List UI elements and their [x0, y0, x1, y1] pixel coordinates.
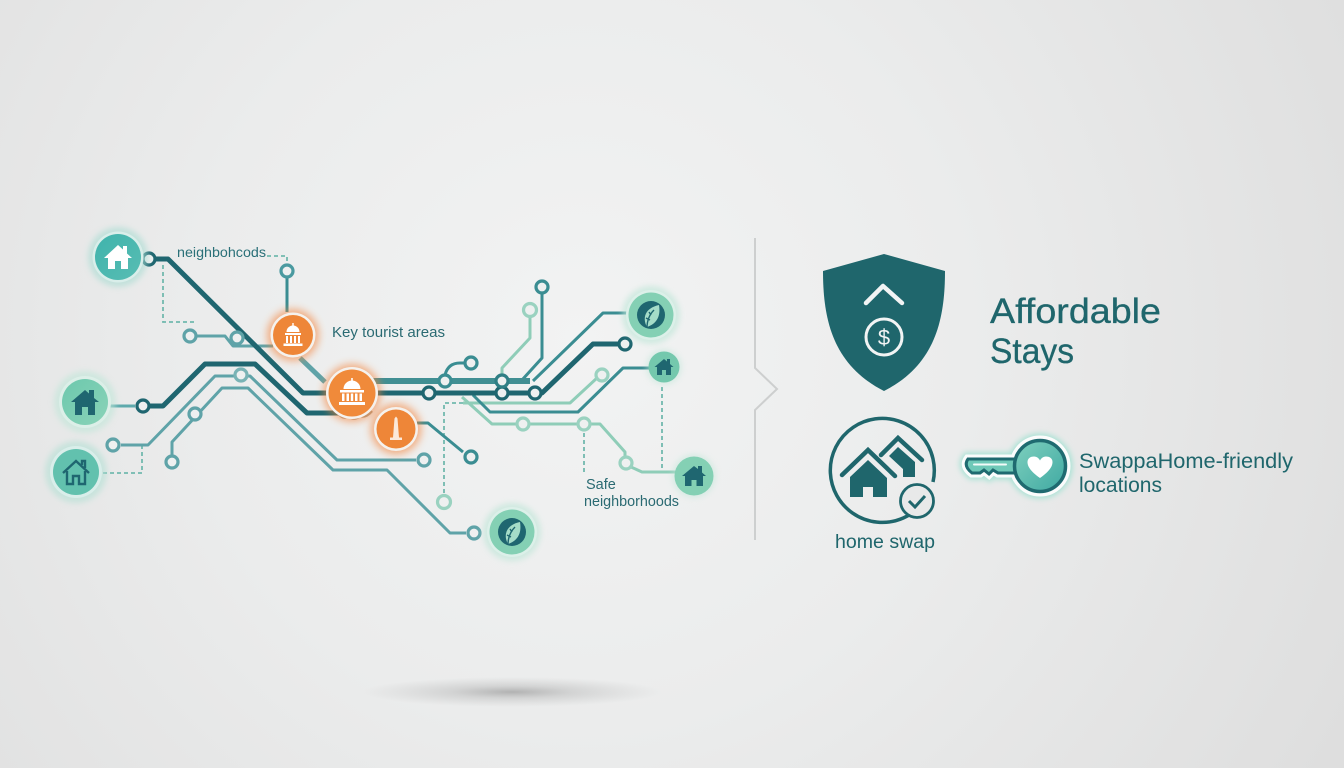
dark routes — [150, 259, 618, 413]
icon: leaf upper right — [622, 286, 680, 344]
panel: affordable stays — [823, 254, 1161, 391]
icon: orange monument — [370, 404, 422, 454]
divider arrow — [755, 238, 777, 540]
icon: small house right — [646, 349, 682, 385]
label: home swap: home swap — [835, 532, 935, 553]
heading: affordable stays: Stays — [990, 332, 1074, 371]
icon: dark route bumps under capitol — [338, 411, 372, 418]
mid teal routes — [108, 336, 466, 533]
label: swappahome-friendly locations: SwappaHome-friendly — [1079, 450, 1294, 473]
icon: house green middle left — [54, 371, 116, 433]
icon: orange capitol large — [323, 364, 381, 422]
panel: swap-friendly key — [966, 440, 1294, 497]
label: key tourist areas: Key tourist areas — [332, 325, 445, 341]
label: neighborhoods: neighbohcods — [177, 244, 266, 260]
icon: house lower right — [672, 454, 716, 498]
icon: leaf lower — [483, 503, 541, 561]
label: safe neighborhoods: neighborhoods — [584, 494, 679, 510]
label: swappahome-friendly locations: locations — [1079, 474, 1162, 497]
route network map — [45, 227, 716, 561]
label: safe neighborhoods: Safe — [586, 477, 616, 493]
icon: orange capitol small — [267, 309, 319, 361]
icon: house teal top left — [88, 227, 148, 287]
dashed connector lines — [103, 256, 662, 493]
icon: key with heart — [966, 440, 1066, 492]
icon: shield with dollar: $ — [878, 325, 890, 350]
icon: houses in circle with check — [830, 418, 934, 522]
light green routes — [462, 318, 677, 472]
ground shadow — [362, 677, 662, 707]
route nodes — [107, 253, 632, 539]
teal routes — [287, 278, 650, 452]
panel: home swap — [830, 418, 935, 553]
icon: shield with dollar — [823, 254, 945, 391]
icon: house outline lower left — [45, 441, 107, 503]
heading: affordable stays: Affordable — [990, 292, 1161, 331]
